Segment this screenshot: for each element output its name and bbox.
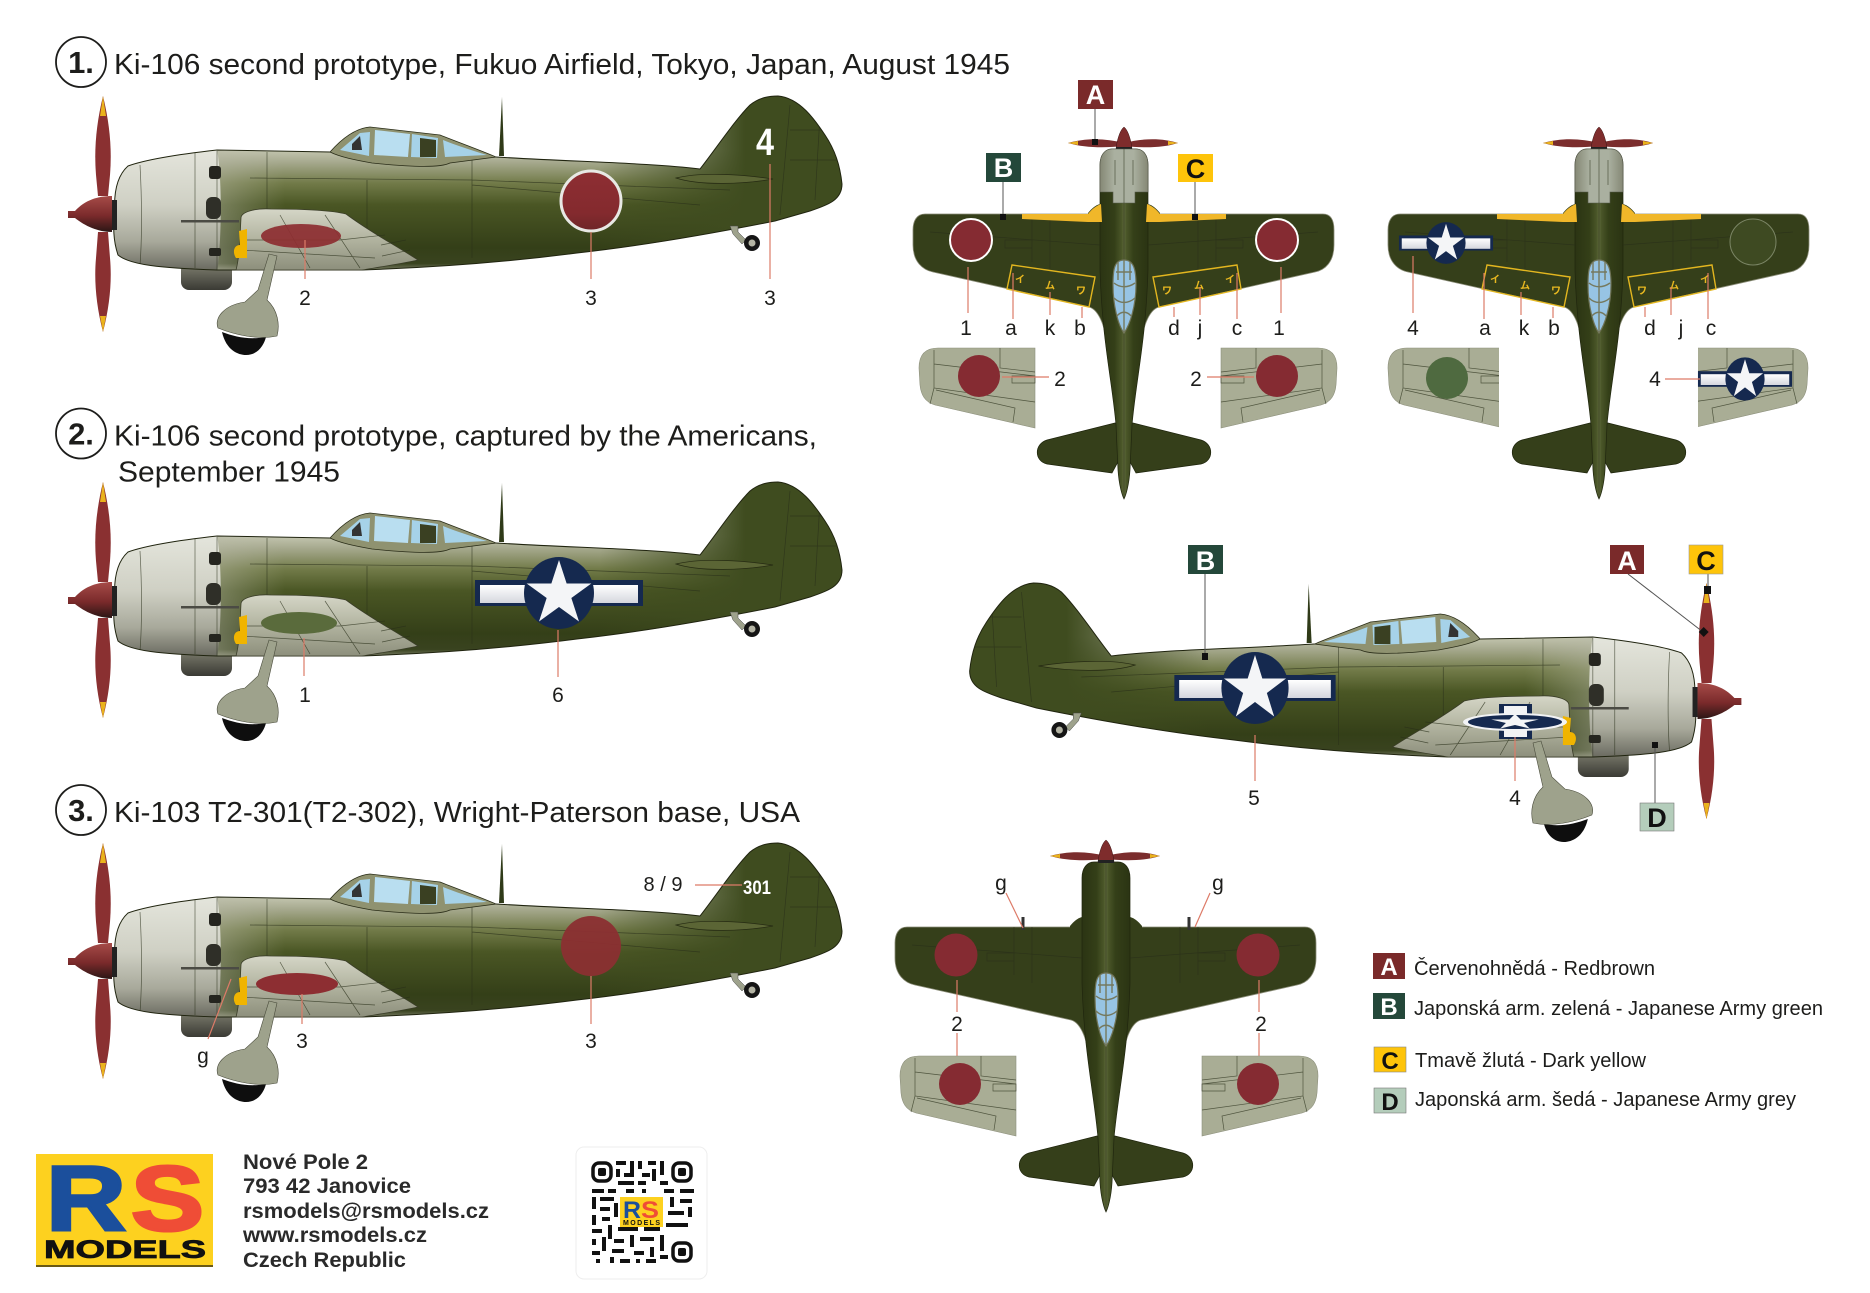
logo: RS Models bbox=[36, 1148, 213, 1267]
callouts: top view 1: 1 bbox=[960, 317, 972, 340]
address: Czech Republic bbox=[243, 1249, 406, 1272]
side view: aircraft 1 bbox=[68, 90, 850, 355]
address: www.rsmodels.cz bbox=[242, 1224, 427, 1247]
logo: RS Models: S bbox=[131, 1148, 204, 1250]
legend bbox=[1373, 953, 1823, 1116]
callouts: aircraft 3: g bbox=[197, 1045, 209, 1068]
colour callouts: large side view: D bbox=[1647, 803, 1667, 833]
callouts: aircraft 1: 3 bbox=[764, 287, 776, 310]
US insignia fuselage bbox=[475, 557, 643, 629]
QR code: S bbox=[641, 1197, 659, 1224]
callouts: top view 1: k bbox=[1045, 317, 1056, 340]
flap markings bbox=[1482, 265, 1716, 307]
QR code bbox=[576, 1147, 707, 1279]
top view 2 bbox=[1388, 127, 1809, 499]
flap markings: ワ bbox=[1637, 285, 1647, 297]
QR code: MODELS bbox=[623, 1220, 660, 1227]
heading: scheme 3: 3. bbox=[68, 793, 94, 828]
callouts: large side view: 4 bbox=[1509, 787, 1521, 810]
top view 1 bbox=[913, 127, 1334, 499]
callouts: aircraft 2: 6 bbox=[552, 684, 564, 707]
heading: scheme 1: 1. bbox=[68, 45, 94, 80]
flap markings: ワ bbox=[1162, 285, 1172, 297]
callouts: top view 1: b bbox=[1074, 317, 1086, 340]
hinomaru fuselage bbox=[561, 916, 621, 976]
callouts: aircraft 2: 1 bbox=[299, 684, 311, 707]
flap markings: ワ bbox=[1076, 285, 1086, 297]
callouts: top view 3: g bbox=[995, 872, 1007, 895]
US insignia wing bbox=[1463, 704, 1567, 739]
callouts: top view 2: b bbox=[1548, 317, 1560, 340]
callouts: large side view bbox=[1248, 735, 1521, 810]
heading: scheme 2: September 1945 bbox=[118, 456, 340, 488]
wing guns bbox=[1023, 917, 1189, 930]
flap markings: イ bbox=[1225, 274, 1235, 286]
address: Nové Pole 2 bbox=[243, 1151, 368, 1174]
heading: scheme 2: Ki-106 second prototype, captured by the Americans, bbox=[114, 420, 817, 452]
callouts: top view 1: 1 bbox=[1273, 317, 1285, 340]
callouts: top view 2: c bbox=[1706, 317, 1716, 340]
callouts: aircraft 2 bbox=[299, 630, 564, 707]
flap markings: ム bbox=[1520, 280, 1530, 292]
callouts: top view 3: 2 bbox=[1255, 1013, 1267, 1036]
address bbox=[242, 1151, 489, 1272]
colour callouts: large side view: A bbox=[1617, 546, 1637, 576]
callouts: aircraft 1 bbox=[299, 164, 776, 310]
callouts: top view 1: c bbox=[1232, 317, 1242, 340]
logo: RS Models: MODELS bbox=[44, 1236, 206, 1264]
flap markings: ム bbox=[1194, 280, 1204, 292]
callouts: top view 1: d bbox=[1168, 317, 1180, 340]
flap markings bbox=[1007, 265, 1241, 307]
overpainted disc bbox=[1730, 219, 1776, 265]
legend D: Japonská arm. šedá - Japanese Army grey bbox=[1415, 1089, 1796, 1111]
flap markings: イ bbox=[1700, 274, 1710, 286]
underwing insets: view 1: 2 bbox=[1054, 368, 1066, 391]
flap markings: イ bbox=[1015, 274, 1025, 286]
hinomaru fuselage bbox=[561, 171, 621, 231]
callouts: top view 3: g bbox=[1212, 872, 1224, 895]
side view: aircraft 2 bbox=[68, 476, 850, 741]
callouts: aircraft 3: 8 / 9 bbox=[644, 874, 682, 896]
colour callouts: top view 1 bbox=[986, 80, 1213, 220]
address: 793 42 Janovice bbox=[243, 1175, 411, 1198]
address: rsmodels@rsmodels.cz bbox=[243, 1200, 489, 1223]
callouts: top view 2: a bbox=[1479, 317, 1491, 340]
hinomaru upper wings bbox=[950, 219, 1298, 261]
heading: scheme 2: 2. bbox=[68, 416, 94, 452]
colour callouts: top view 1: A bbox=[1086, 80, 1105, 110]
QR code: R bbox=[623, 1197, 641, 1224]
hinomaru upper wings bbox=[934, 934, 1280, 976]
large side view bbox=[962, 577, 1741, 842]
underwing insets: view 2: 4 bbox=[1649, 368, 1661, 391]
legend A: A bbox=[1380, 954, 1398, 981]
heading: scheme 1 bbox=[56, 37, 1010, 87]
legend D: D bbox=[1381, 1089, 1399, 1116]
hinomaru wing bbox=[256, 973, 338, 995]
flap markings: ム bbox=[1669, 280, 1679, 292]
legend B: B bbox=[1380, 994, 1398, 1021]
callouts: top view 1 bbox=[960, 267, 1285, 340]
colour callouts: top view 1: C bbox=[1186, 154, 1205, 184]
top view 3 bbox=[895, 840, 1316, 1212]
callouts: top view 2 bbox=[1407, 256, 1716, 340]
flap markings: ワ bbox=[1551, 285, 1561, 297]
US insignia fuselage bbox=[1174, 652, 1336, 724]
callouts: top view 2: 4 bbox=[1407, 317, 1419, 340]
legend C: Tmavě žlutá - Dark yellow bbox=[1415, 1050, 1647, 1072]
callouts: aircraft 1: 2 bbox=[299, 287, 311, 310]
heading: scheme 2 bbox=[56, 408, 817, 488]
flap markings: イ bbox=[1490, 274, 1500, 286]
callouts: aircraft 3: 3 bbox=[585, 1030, 597, 1053]
colour callouts: top view 1: B bbox=[994, 153, 1013, 183]
side view: aircraft 3 bbox=[68, 837, 850, 1102]
hinomaru wing bbox=[261, 224, 341, 248]
underwing insets: view 3 bbox=[900, 1056, 1318, 1136]
callouts: top view 2: j bbox=[1678, 317, 1683, 340]
colour callouts: large side view: C bbox=[1696, 546, 1716, 576]
colour callouts: large side view: B bbox=[1196, 546, 1215, 576]
fin number 4: 4 bbox=[756, 122, 774, 164]
callouts: aircraft 3: 3 bbox=[296, 1030, 308, 1053]
underwing insets: view 1: 2 bbox=[1190, 368, 1202, 391]
logo: RS Models: R bbox=[46, 1148, 126, 1250]
fin code 301: 301 bbox=[743, 878, 771, 899]
legend A: Červenohnědá - Redbrown bbox=[1414, 957, 1655, 980]
callouts: top view 2: k bbox=[1519, 317, 1530, 340]
callouts: aircraft 3 bbox=[197, 874, 742, 1068]
callouts: top view 1: j bbox=[1197, 317, 1202, 340]
underwing insets: view 1 bbox=[919, 348, 1337, 428]
callouts: aircraft 1: 3 bbox=[585, 287, 597, 310]
callouts: top view 2: d bbox=[1644, 317, 1656, 340]
legend C: C bbox=[1381, 1048, 1399, 1075]
legend A bbox=[1373, 953, 1655, 981]
colour callouts: large side view bbox=[1188, 545, 1723, 833]
heading: scheme 1: Ki-106 second prototype, Fukuo Airfield, Tokyo, Japan, August 1945 bbox=[114, 49, 1010, 81]
callouts: large side view: 5 bbox=[1248, 787, 1260, 810]
callouts: top view 3: 2 bbox=[951, 1013, 963, 1036]
green wing disc bbox=[261, 612, 337, 634]
heading: scheme 3 bbox=[56, 785, 801, 835]
legend C bbox=[1374, 1047, 1647, 1075]
underwing insets: view 2 bbox=[1388, 345, 1808, 435]
callouts: top view 3 bbox=[951, 872, 1267, 1058]
callouts: top view 1: a bbox=[1005, 317, 1017, 340]
legend B: Japonská arm. zelená - Japanese Army green bbox=[1414, 998, 1823, 1020]
flap markings: ム bbox=[1045, 280, 1055, 292]
heading: scheme 3: Ki-103 T2-301(T2-302), Wright-Paterson base, USA bbox=[114, 797, 801, 829]
US insignia upper wing bbox=[1399, 222, 1493, 264]
